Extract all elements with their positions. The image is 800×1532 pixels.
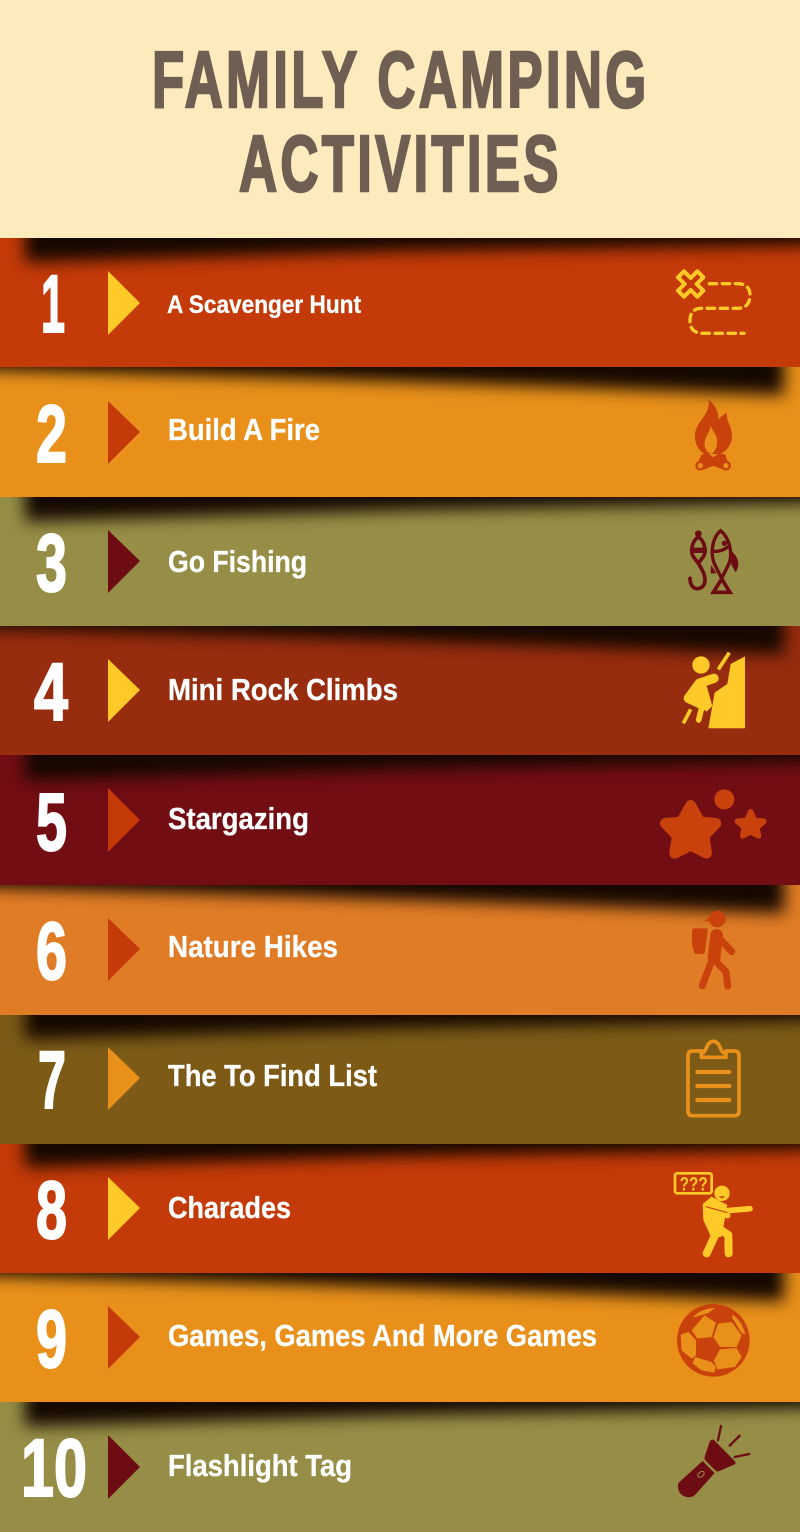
panel: activity 10: Flashlight Tag — [168, 1448, 352, 1483]
icon: charades player: ??? — [680, 1174, 708, 1195]
panel: activity 3: Go Fishing — [168, 544, 307, 579]
title — [0, 0, 800, 238]
panel: activity 8 — [0, 1144, 800, 1273]
panel: activity 5 — [0, 755, 800, 885]
panel: activity 10 — [0, 1402, 800, 1532]
panel: activity 3 — [0, 497, 800, 626]
panel: activity 1: 1 — [41, 259, 65, 350]
panel: activity 7: 7 — [38, 1035, 66, 1126]
panel: activity 5: 5 — [36, 777, 67, 868]
title: ACTIVITIES — [239, 120, 558, 209]
icon: treasure map path — [678, 271, 750, 333]
panel: activity 9: Games, Games And More Games — [168, 1318, 597, 1353]
title: FAMILY CAMPING — [152, 36, 646, 125]
panel: activity 6: Nature Hikes — [168, 929, 338, 964]
panel: activity 8: Charades — [168, 1190, 291, 1225]
icon: rock climber — [683, 653, 745, 728]
panel: activity 2: 2 — [36, 389, 67, 480]
icon: flashlight — [678, 1426, 749, 1497]
panel: activity 3: 3 — [36, 518, 67, 609]
panel: activity 1 — [0, 238, 800, 367]
panel: activity 7 — [0, 1015, 800, 1144]
panel: activity 2 — [0, 367, 800, 497]
icon: fish and hook — [690, 530, 738, 592]
panel: activity 7: The To Find List — [168, 1058, 377, 1093]
panel: activity 4: 4 — [34, 647, 68, 738]
panel: activity 6: 6 — [36, 906, 67, 997]
panel: activity 4 — [0, 626, 800, 755]
panel: activity 2: Build A Fire — [168, 412, 320, 447]
panel: activity 6 — [0, 885, 800, 1015]
panel: activity 9 — [0, 1273, 800, 1402]
panel: activity 4: Mini Rock Climbs — [168, 672, 398, 707]
icon: clipboard — [688, 1041, 739, 1116]
icon: hiker — [692, 911, 732, 986]
icon: stars and moon — [665, 789, 764, 853]
panel: activity 5: Stargazing — [168, 801, 309, 836]
panel: activity 9: 9 — [36, 1294, 67, 1385]
icon: charades player — [675, 1173, 750, 1253]
icon: soccer ball — [677, 1304, 750, 1377]
panel: activity 10: 10 — [21, 1423, 87, 1514]
panel: activity 1: A Scavenger Hunt — [167, 291, 362, 319]
panel: activity 8: 8 — [36, 1165, 67, 1256]
icon: campfire — [695, 399, 732, 471]
